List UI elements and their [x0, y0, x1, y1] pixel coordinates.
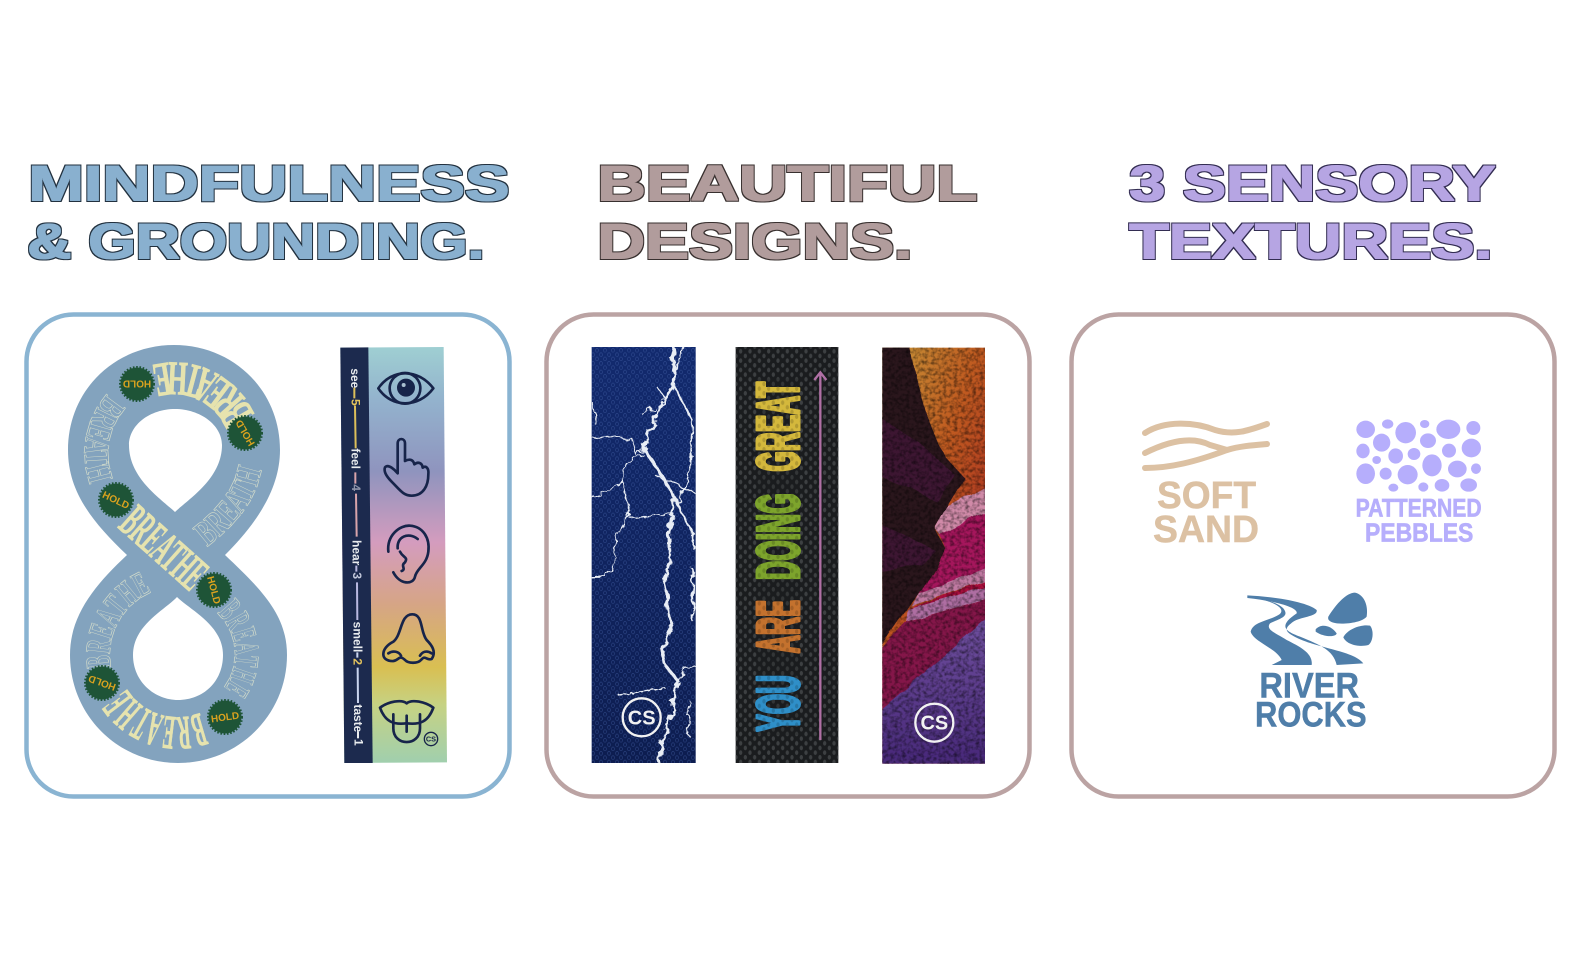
five senses strip: taste — [351, 704, 365, 733]
panel: 3 sensory textures — [1072, 314, 1554, 796]
icon and label: soft sand — [1145, 424, 1267, 551]
five senses strip: 3 — [350, 572, 364, 579]
you are doing great strip: GREAT — [744, 382, 811, 472]
icon and label: river rocks: ROCKS — [1255, 696, 1367, 735]
five senses strip: see — [348, 368, 362, 389]
icon and label: patterned pebbles: PEBBLES — [1365, 518, 1473, 548]
lightning strip: CS — [628, 707, 656, 729]
heading: 3 sensory textures: 3 SENSORY — [1129, 156, 1495, 212]
heading: mindfulness and grounding — [27, 156, 509, 270]
icon and label: patterned pebbles — [1356, 419, 1482, 548]
figure-eight breathing strip: HOLD — [100, 490, 131, 512]
icon and label: patterned pebbles: PATTERNED — [1356, 496, 1482, 523]
heading: 3 sensory textures: TEXTURES. — [1129, 214, 1492, 270]
figure-eight breathing strip: BREATHE — [217, 597, 259, 699]
you are doing great strip: DOING — [744, 493, 811, 580]
five senses strip: 5 — [348, 399, 362, 406]
heading: beautiful designs: BEAUTIFUL — [597, 156, 977, 212]
you are doing great strip: YOU — [744, 675, 811, 732]
five senses strip: 4 — [349, 484, 363, 491]
icon and label: river rocks — [1247, 593, 1373, 735]
five senses strip: 2 — [351, 658, 365, 665]
figure-eight breathing strip: BREATHE — [86, 572, 151, 669]
heading: mindfulness and grounding: MINDFULNESS — [28, 156, 509, 212]
figure-eight breathing strip: BREATHE — [102, 689, 209, 750]
figure-eight breathing strip: BREATHE — [116, 503, 210, 592]
figure-eight breathing strip: HOLD — [87, 672, 118, 692]
lightning strip — [588, 345, 698, 765]
figure-eight breathing strip: BREATHE — [152, 362, 255, 430]
five senses strip: hear — [350, 540, 364, 566]
heading: mindfulness and grounding: & GROUNDING. — [27, 214, 484, 270]
five senses strip: CS — [426, 735, 436, 744]
five senses strip: feel — [349, 448, 363, 469]
figure-eight breathing strip: HOLD — [204, 575, 222, 605]
five senses strip: smell — [350, 622, 364, 652]
panel: beautiful designs — [546, 314, 1030, 796]
canyon strip: CS — [920, 713, 948, 735]
panel: mindfulness and grounding — [24, 312, 512, 799]
figure-eight breathing strip: HOLD — [210, 711, 240, 725]
five senses strip — [340, 347, 447, 763]
icon and label: river rocks: RIVER — [1259, 666, 1359, 705]
heading: beautiful designs: DESIGNS. — [597, 214, 912, 270]
figure-eight breathing strip: HOLD — [123, 378, 151, 388]
icon and label: soft sand: SAND — [1153, 509, 1259, 551]
five senses strip: 1 — [351, 739, 365, 746]
figure-eight breathing strip: HOLD — [234, 417, 258, 448]
icon and label: soft sand: SOFT — [1157, 475, 1256, 517]
heading: beautiful designs — [597, 156, 977, 270]
canyon strip — [875, 345, 988, 767]
you are doing great strip — [736, 347, 838, 763]
heading: 3 sensory textures — [1129, 156, 1495, 270]
figure-eight breathing strip — [68, 345, 287, 763]
you are doing great strip: ARE — [744, 600, 811, 653]
